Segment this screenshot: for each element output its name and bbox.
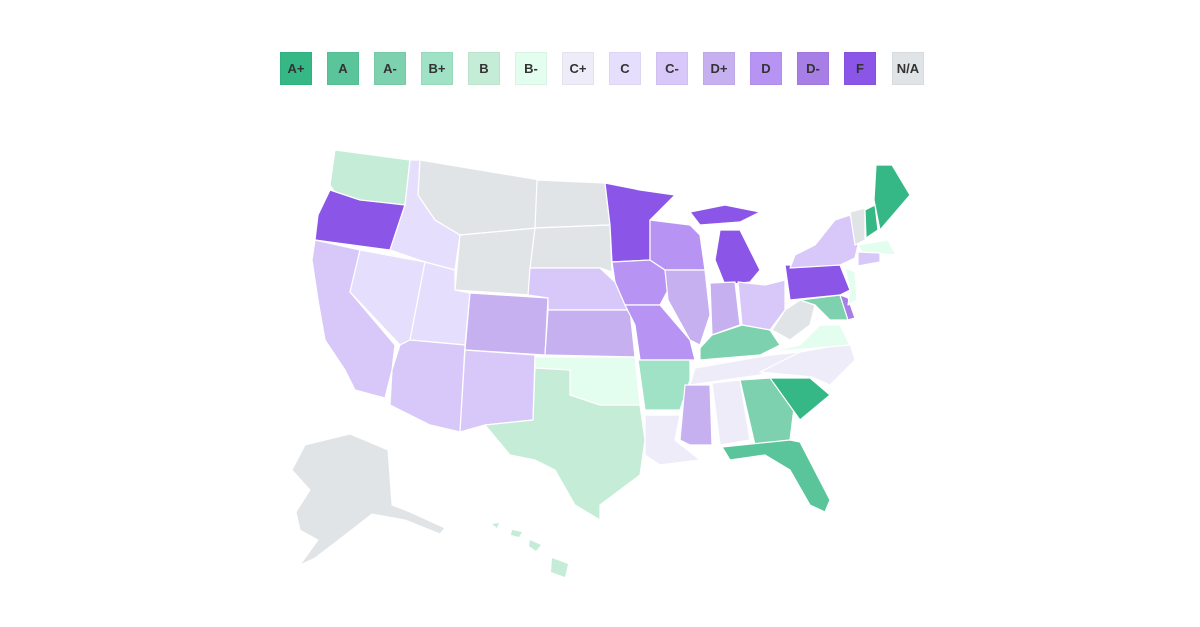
- legend: A: [338, 61, 348, 76]
- legend: D+: [710, 61, 727, 76]
- legend: F: [856, 61, 864, 76]
- legend: [280, 52, 924, 85]
- legend: C: [620, 61, 630, 76]
- Alaska: [292, 434, 445, 565]
- legend: B: [479, 61, 489, 76]
- legend: C+: [570, 61, 586, 76]
- legend: B+: [428, 61, 445, 76]
- legend: C-: [665, 61, 679, 76]
- Hawaii: [492, 523, 568, 577]
- legend: B-: [524, 61, 538, 76]
- legend: D-: [806, 61, 820, 76]
- legend: A+: [288, 61, 304, 76]
- legend: A-: [383, 61, 397, 76]
- legend: N/A: [897, 61, 919, 76]
- legend: D: [761, 61, 771, 76]
